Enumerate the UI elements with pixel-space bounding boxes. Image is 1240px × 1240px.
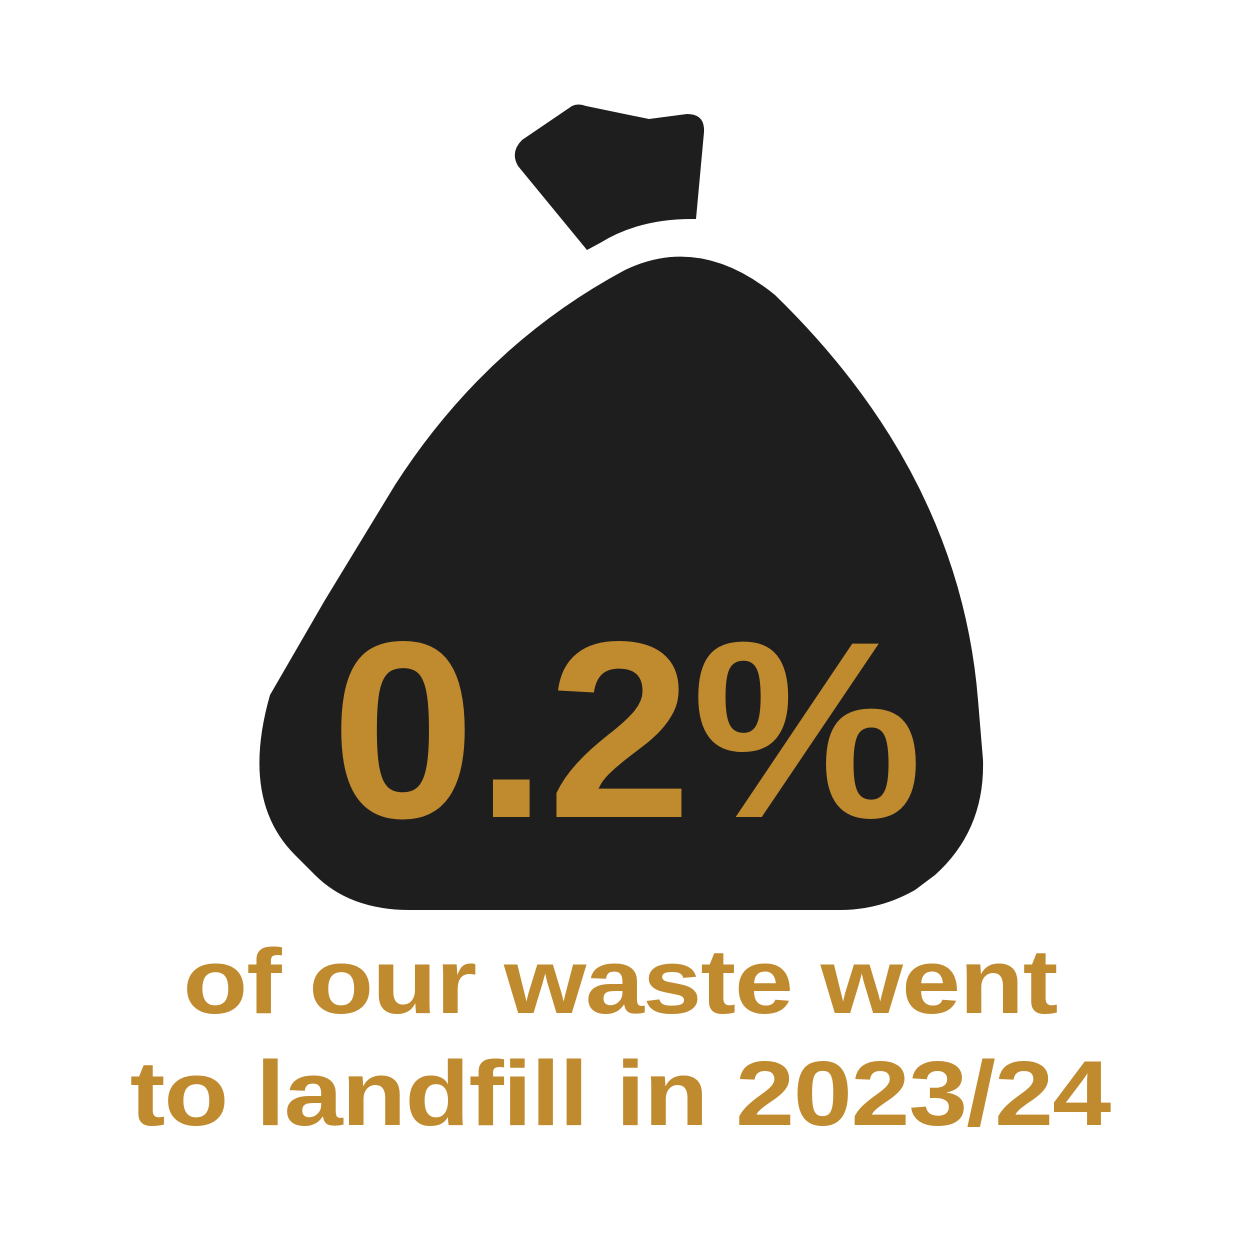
caption xyxy=(130,931,1111,1145)
bag body xyxy=(259,257,983,910)
caption: of our waste went xyxy=(183,931,1057,1033)
bag knot xyxy=(515,104,704,250)
headline number: 0.2% xyxy=(331,590,923,871)
caption: to landfill in 2023/24 xyxy=(130,1043,1110,1145)
